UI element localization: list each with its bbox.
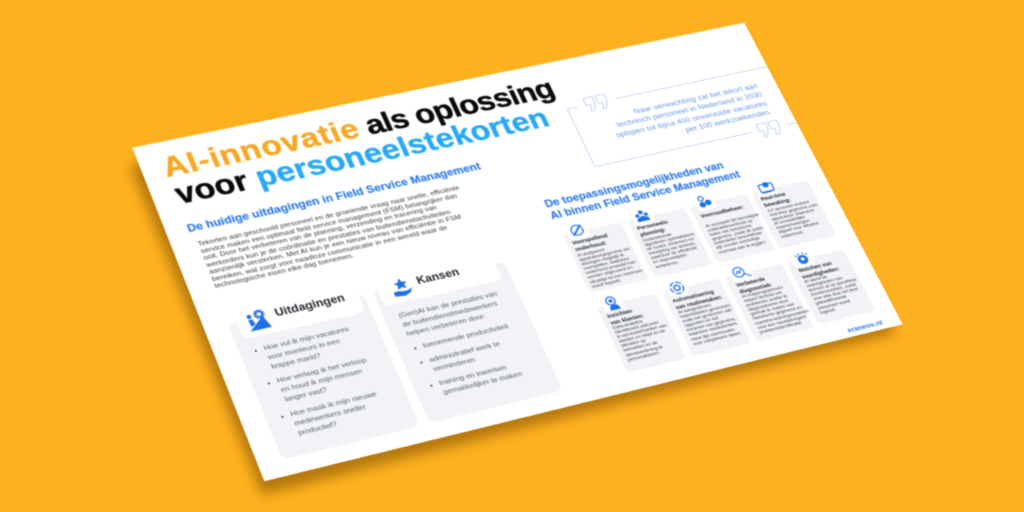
card text xyxy=(612,318,668,363)
icon: opening quote marks xyxy=(582,93,608,112)
title: als oplossing xyxy=(360,73,559,141)
icon: gear cycle xyxy=(668,280,686,295)
card: Real-time bewaking xyxy=(752,181,835,248)
card heading: Voorraadbeheer: xyxy=(699,204,745,219)
card heading: vaardigheden: xyxy=(801,266,840,280)
card heading xyxy=(636,219,670,238)
card text: voorspellen, waardoor xyxy=(582,256,630,271)
card heading: planning: xyxy=(639,227,667,238)
card text: gegevens, zodat de juiste xyxy=(711,225,764,242)
challenge list: en houd ik mijn mensen xyxy=(280,368,364,394)
challenge list: langer vast? xyxy=(283,386,328,403)
icon: stacked circles xyxy=(696,195,712,208)
card text: dienstverlening te xyxy=(624,344,664,358)
intro paragraph: aanzienlijk versterken. Met AI kun je een nieuw niveau van efficiëntie in FSM xyxy=(208,214,463,276)
card text: waarschuwingen xyxy=(775,218,811,230)
opportunity list xyxy=(414,323,523,396)
panel heading: Kansen: Kansen xyxy=(414,266,461,286)
card text: gebruik te maken van xyxy=(749,301,795,317)
intro paragraph: Tekorten aan geschoold personeel en de groeiende vraag naar snelle, efficiënte xyxy=(197,185,461,248)
opportunity list: toenemende productiviteit xyxy=(422,323,510,350)
card text xyxy=(641,231,698,269)
card text: behoeften en de xyxy=(622,340,659,353)
card text: problemen sneller te xyxy=(745,293,789,308)
card text: AI-hulpprogramma's xyxy=(741,285,784,299)
card text: toewijzing van technici, xyxy=(648,241,697,256)
card text: onderdelenverbruik op xyxy=(706,218,754,233)
card text: apparatuurgegevens om xyxy=(578,246,631,262)
card heading xyxy=(760,191,792,208)
intro paragraph: service maken een optimaal field service management (FSM) belangrijker dan xyxy=(199,192,458,255)
intro paragraph: technologische eisen elke dag toenemen. xyxy=(213,252,355,290)
card text: afgeeft voor efficiënt xyxy=(777,221,820,235)
card text: probleemidentificatie. xyxy=(758,319,804,335)
card text: onderhoud proactief kan xyxy=(584,259,637,276)
title: AI-innovatie xyxy=(157,113,365,183)
opportunity intro: (Gen)AI kan de prestaties van xyxy=(397,290,498,320)
opportunity list: administratief werk te xyxy=(428,340,501,364)
card text: hulpmiddelen genereren, xyxy=(679,302,732,319)
opportunity list: verminderen xyxy=(432,356,477,373)
card text: real-time gegevens over xyxy=(769,202,818,218)
challenge list: medewerkers sneller xyxy=(293,403,367,428)
card text: voor complexere taken. xyxy=(692,330,742,346)
card text: apparatuur, waardoor xyxy=(771,208,815,222)
panel heading: Uitdagingen: Uitdagingen xyxy=(273,292,347,319)
icon: people xyxy=(634,210,651,223)
card: Matchen van vaardigheden xyxy=(782,241,876,325)
card text xyxy=(803,269,869,315)
card: Voorspellend onderhoud xyxy=(564,223,646,292)
card text: klanten en helpt zo de xyxy=(618,328,666,344)
card heading: onderhoud: xyxy=(574,240,608,252)
card text: voor een nauwkeurigere xyxy=(756,313,807,330)
card text: machine-learningmodellen xyxy=(754,308,810,326)
card text: vaardigheden van xyxy=(805,275,843,289)
card: Personeelsplanning xyxy=(629,209,711,277)
card text: AI-aangedreven xyxy=(677,302,712,315)
card heading xyxy=(571,232,609,252)
card text: worden uitgevoerd en xyxy=(587,265,633,280)
panel: Uitdagingen xyxy=(230,292,418,458)
card text: ingezet. xyxy=(819,306,837,315)
quote text: oplopen tot bijna 400 onvervulde vacatures xyxy=(614,99,768,139)
card text: verbeteren. xyxy=(654,259,680,269)
icon: head with ideas xyxy=(792,250,813,267)
card text: personaliseren. xyxy=(627,349,661,362)
icon: wrench xyxy=(570,224,584,237)
card text: technici af op specifieke xyxy=(808,277,857,293)
opportunity intro: de buitendienstmedewerkers xyxy=(401,300,499,329)
card text: de routes, schema's en xyxy=(646,236,695,252)
title: voor xyxy=(170,165,253,210)
challenge list: krappe markt? xyxy=(270,352,322,371)
card text: Ondersteunde xyxy=(641,232,673,243)
card heading xyxy=(606,308,645,326)
card heading: Voorspellend xyxy=(571,233,609,246)
icon: monitor xyxy=(756,181,776,194)
challenge list: Hoe verlaag ik het verloop xyxy=(276,357,368,385)
card text: personeel wordt xyxy=(817,298,851,311)
opportunity intro: helpen verbeteren door: xyxy=(405,313,487,338)
card text: AI voorspelt het benodigde xyxy=(704,212,760,229)
icon: closing quote marks xyxy=(755,119,781,138)
card text: voor elke klus het best xyxy=(812,286,859,302)
opportunity list: gemakkelijker te maken xyxy=(442,370,523,396)
heading: applications: De toepassingsmogelijkheden van xyxy=(542,160,726,210)
card text: rapporten en het xyxy=(683,315,720,328)
card text: waardoor medewerkers xyxy=(688,321,738,337)
card text: helpen technici om xyxy=(743,290,783,304)
card heading: diagnostiek: xyxy=(738,282,773,295)
card heading: Personeels- xyxy=(636,219,670,231)
card text: onderdelen beschikbaar xyxy=(713,230,763,246)
challenge list: voor monteurs in een xyxy=(266,338,341,361)
icon: slope with gear xyxy=(246,308,272,332)
intro paragraph: ooit. Door het verbeteren van de planning, verzending en tracering van xyxy=(202,204,438,262)
card text: identificeert patronen xyxy=(614,320,660,335)
card text: algoritmen optimaliseren xyxy=(643,231,695,247)
quote text: Naar verwachting zal het tekort aan xyxy=(632,82,759,115)
card heading xyxy=(735,276,773,295)
icon: magnifier xyxy=(731,266,752,278)
card text: functievereisten, zodat xyxy=(810,282,857,297)
quote text xyxy=(614,82,773,139)
card text xyxy=(704,212,767,255)
footer: website: eraneos.nl xyxy=(846,319,884,334)
card text: wordt beperkt. xyxy=(591,277,623,289)
card text: gekwalificeerde xyxy=(814,294,848,306)
card heading: bewaking: xyxy=(763,197,792,208)
title: personeelstekorten xyxy=(250,102,554,193)
card text: waardoor de efficiëntie xyxy=(650,245,698,261)
card heading: Verbeterde xyxy=(735,276,766,288)
card text: zijn zonder overtollige xyxy=(715,235,761,250)
quote text: per 100 werkzoekenden. xyxy=(683,108,773,134)
card text: invoeren van gegevens, xyxy=(685,316,737,333)
panel: Kansen xyxy=(375,263,560,422)
heading: current challenges: De huidige uitdagingen in Field Service Management xyxy=(185,161,483,234)
card text: AI onmiddellijke xyxy=(773,214,806,226)
card text: in servicebehoeften van xyxy=(616,323,668,339)
card text: AI analyseert xyxy=(576,247,606,258)
card heading: Real-time xyxy=(760,191,786,202)
challenge list: Hoe maak ik mijn nieuwe xyxy=(289,391,378,418)
card: Voorraadbeheer xyxy=(691,195,774,262)
card heading xyxy=(797,259,841,280)
card text: IoT-sensoren leveren xyxy=(766,199,810,213)
intro paragraph xyxy=(196,185,463,290)
intro paragraph: werkorders kun je de coördinatie en prestaties van buitendienstactiviteiten xyxy=(205,209,452,269)
card heading: Automatisering xyxy=(671,289,715,304)
title xyxy=(157,73,559,210)
quote callout xyxy=(566,66,798,168)
card text xyxy=(766,199,820,239)
card text: historische gegevens en xyxy=(752,305,803,321)
card text: diagnosticeren door xyxy=(747,298,790,312)
card heading: van routinetaken: xyxy=(674,294,723,310)
card heading: van klanten: xyxy=(609,313,645,326)
quote text: technisch personeel in Nederland in 2030 xyxy=(615,90,764,129)
icon: customer insight xyxy=(604,296,622,312)
card text: uitvaltijd tot een minimum xyxy=(589,267,643,285)
card text xyxy=(677,302,742,346)
card text: storingen mogelijk te xyxy=(580,252,625,267)
card heading: Inzichten xyxy=(606,308,633,319)
card text: en responstijden xyxy=(652,252,688,265)
card: Inzichten van klanten xyxy=(598,294,685,372)
card text: diensten op xyxy=(620,338,647,349)
card heading: Matchen van xyxy=(797,260,833,273)
card text: AI stemt de xyxy=(803,274,828,284)
card text: onderhoud. xyxy=(779,229,804,239)
card text: voorraad aan te leggen. xyxy=(717,239,767,255)
intro paragraph: bereiken, wat zorgt voor naadloze communicatie in een wereld waar de xyxy=(211,224,449,283)
opportunity list: training en inwerken xyxy=(438,364,508,387)
challenge list: Hoe vul ik mijn vacatures xyxy=(263,326,350,352)
heading: applications: AI binnen Field Service Management xyxy=(548,169,742,221)
challenge list: productief? xyxy=(297,421,338,437)
document sheet xyxy=(132,23,903,481)
card: Verbeterde diagnostiek xyxy=(726,265,812,340)
challenge list xyxy=(254,326,378,437)
card: Automatisering van routinetaken xyxy=(664,280,750,356)
card text: meer tijd overhouden xyxy=(690,326,736,342)
card text: Data-analytics xyxy=(612,318,644,330)
card text: zoals het genereren van xyxy=(681,307,733,324)
card text: basis van historische xyxy=(709,223,753,237)
icon: hand with star xyxy=(393,278,413,298)
card text xyxy=(741,282,814,335)
opportunity intro xyxy=(397,290,499,338)
card text xyxy=(576,246,643,289)
